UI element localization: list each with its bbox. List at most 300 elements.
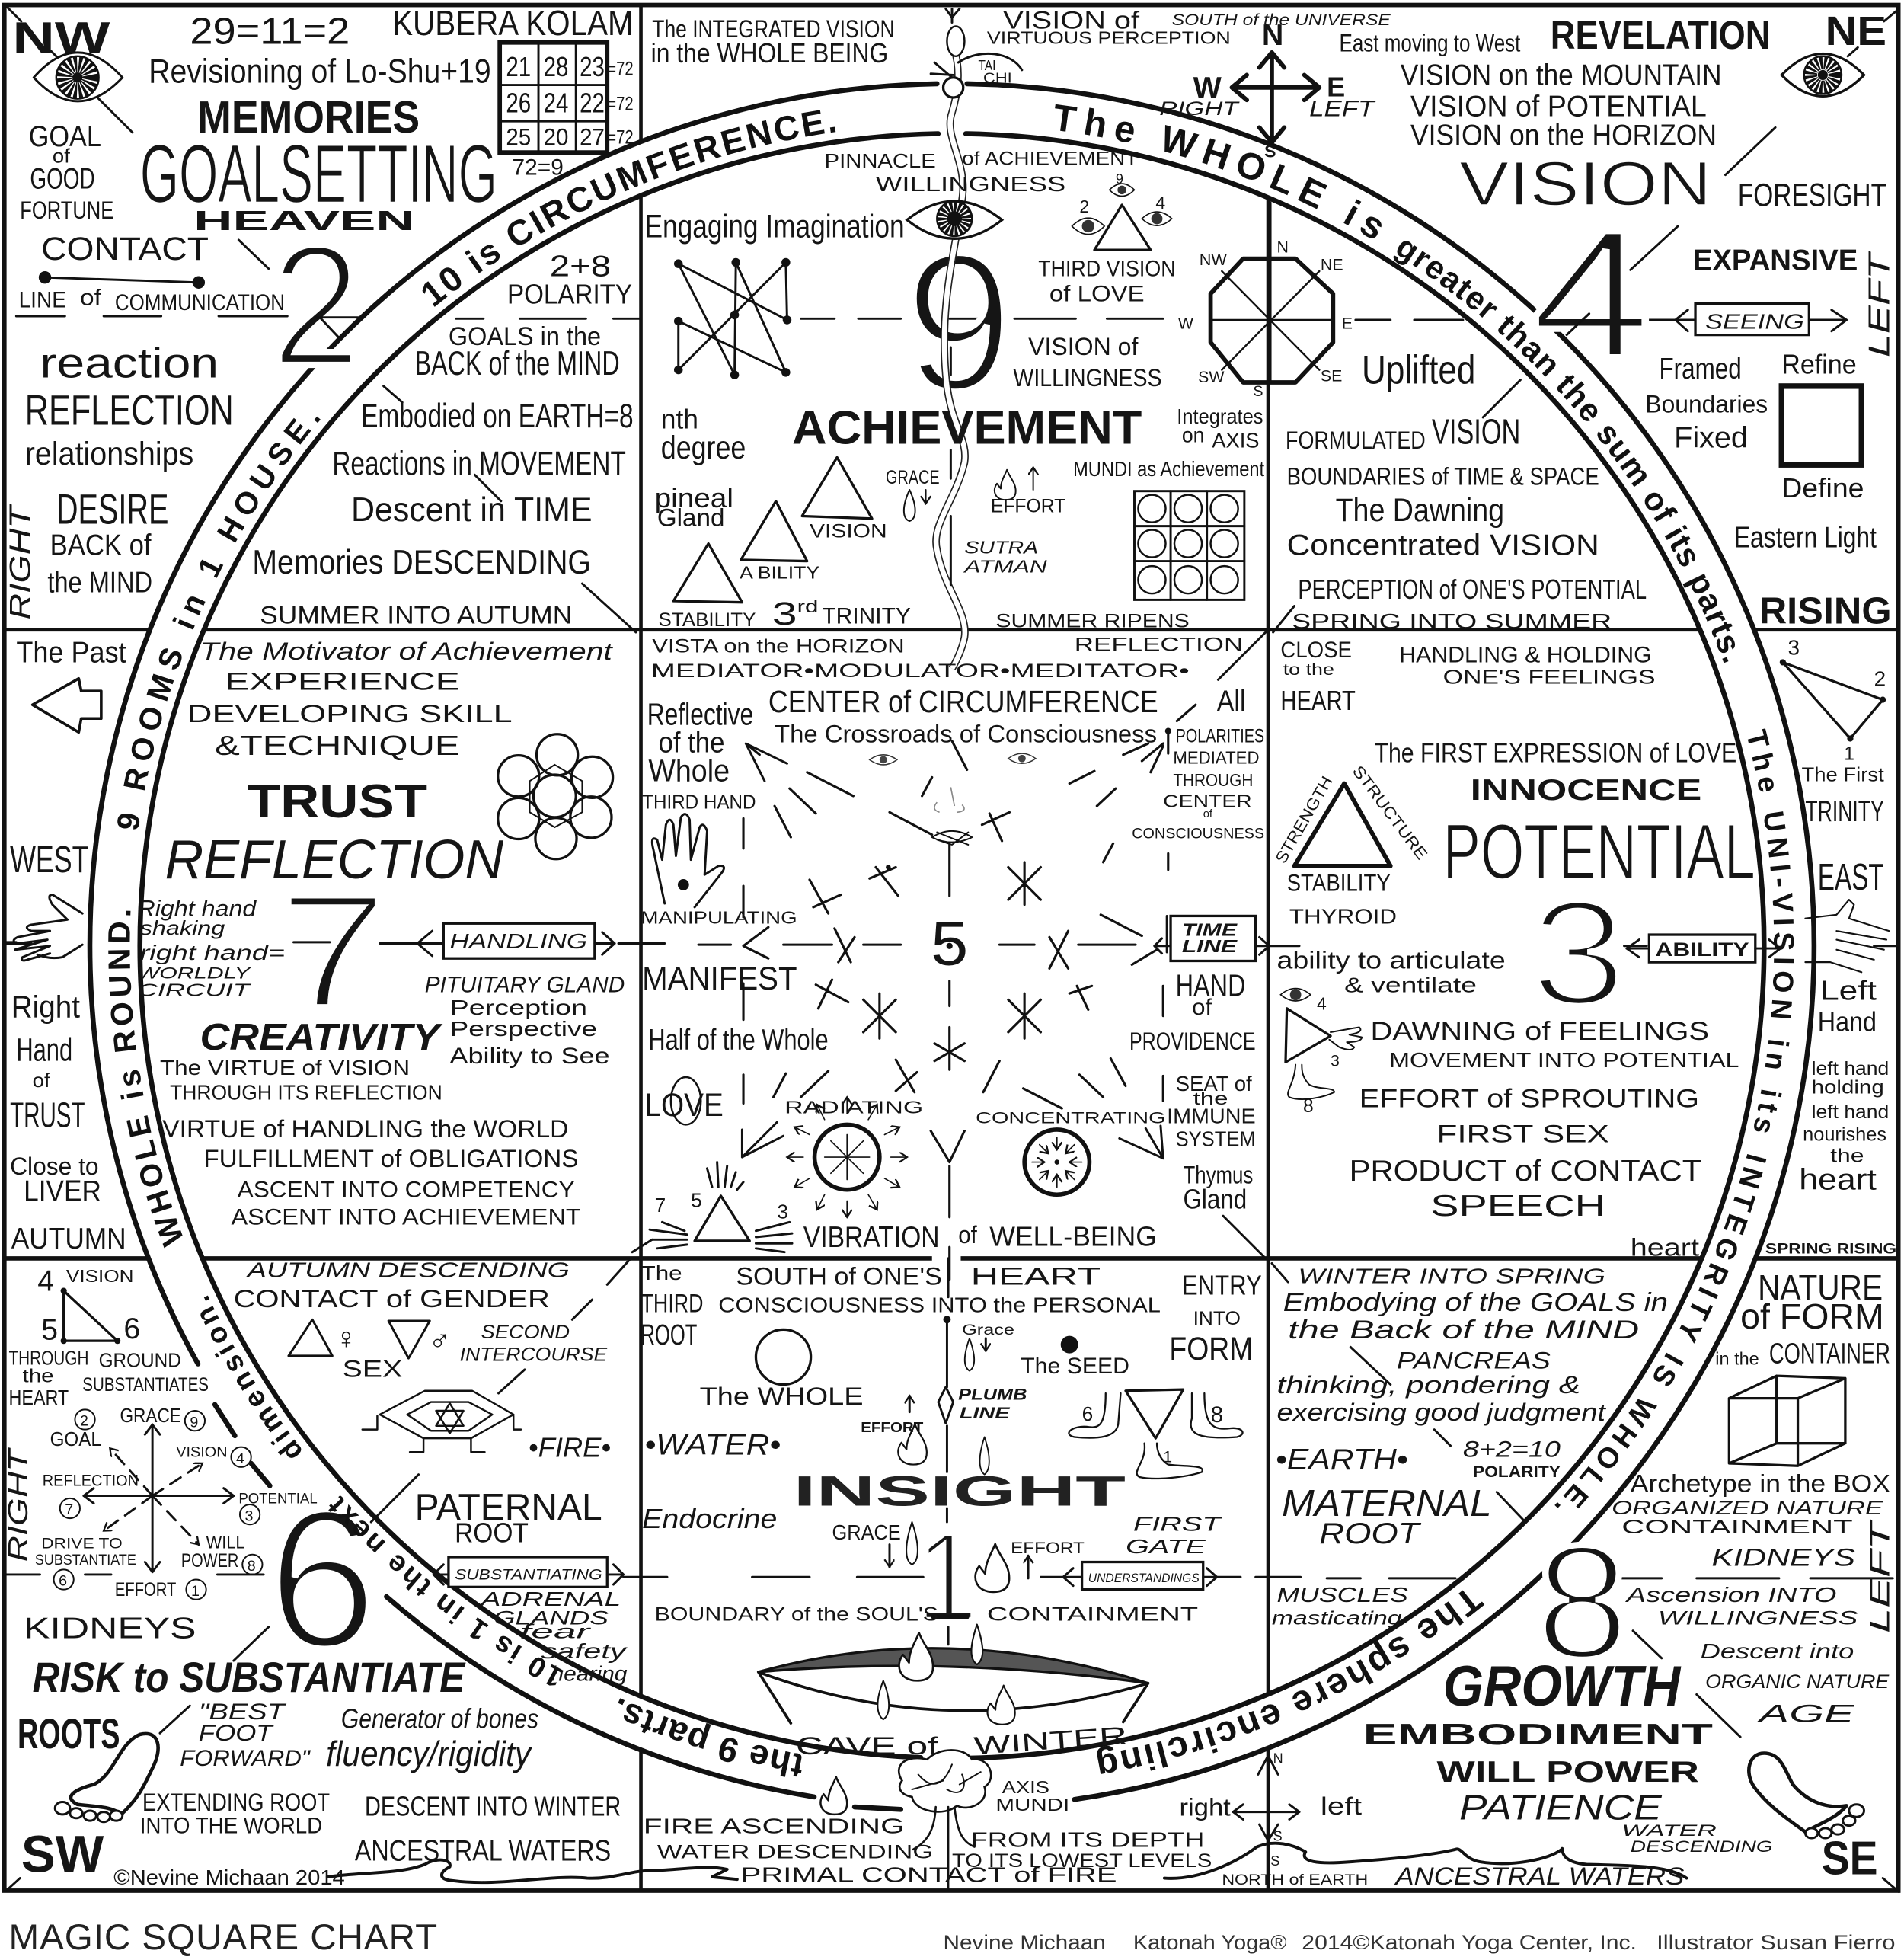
text: fire ascending water descending: PRIMAL CONTACT of FIRE xyxy=(741,1862,1117,1886)
text: manipulating, manifest, love xyxy=(641,907,829,1124)
text: muscles masticating xyxy=(1272,1583,1408,1629)
icon: triangle with eye, hand and foot: 8 xyxy=(1303,1096,1314,1117)
icon: third trinity triangles: VISION xyxy=(810,521,887,542)
text: winter into spring, embodying goals xyxy=(1272,1263,1668,1385)
text: vista and reflection: MEDIATOR•MODULATOR•MEDITATOR• xyxy=(651,661,1190,682)
text: dawning of feelings list: PRODUCT of CONTACT xyxy=(1350,1154,1701,1188)
ring text: 10 is 1 in the next: 10 is 1 in the next xyxy=(328,1495,564,1686)
text: all polarities mediated: of xyxy=(1203,808,1213,820)
text: contact, line of communication: CONTACT xyxy=(41,231,209,267)
text: right hand shaking: right hand= xyxy=(140,941,285,964)
text: generator of bones xyxy=(326,1703,538,1773)
chart: compass of grace and effort: DRIVE TO xyxy=(41,1535,123,1552)
ring text: the 9 parts: the 9 parts. xyxy=(618,1698,802,1777)
callout: substantiating xyxy=(433,1557,624,1587)
text: fire ascending water descending: TO ITS LOWEST LEVELS xyxy=(952,1851,1212,1872)
text: pancreas, thinking: thinking, pondering & xyxy=(1277,1370,1580,1399)
text: paternal root: ROOT xyxy=(455,1517,529,1548)
text: ancestral waters with wave xyxy=(327,1834,737,1882)
icon: gender triangles: ♂ xyxy=(429,1324,451,1357)
panel: N achievement (9) xyxy=(644,6,1391,669)
digit 4 xyxy=(1531,192,1678,397)
chart: kubera kolam number square: 27 xyxy=(580,123,605,150)
panel: W trust reflection (7) xyxy=(4,635,625,1255)
text: left hand nourishes heart xyxy=(1799,974,1889,1197)
text: the third root: ROOT xyxy=(641,1319,697,1351)
text: handling and holding feelings: ONE'S FEELINGS xyxy=(1443,665,1656,688)
text: integrates on axis mundi: Integrates xyxy=(1177,404,1263,428)
icon: octagon compass: W xyxy=(1178,314,1194,332)
panel: SW risk to substantiate (6) xyxy=(2,1258,737,1891)
text: right hand shaking: CIRCUIT xyxy=(137,980,252,999)
text: uplifted, formulated vision: Concentrated VISION xyxy=(1287,528,1599,561)
panel: NE vision (4) xyxy=(1273,8,1899,633)
icon: radiating circle: RADIATING xyxy=(784,1098,923,1117)
text: left hand nourishes heart: Hand xyxy=(1818,1006,1877,1037)
text: descent into organic nature: Descent into xyxy=(1701,1639,1854,1663)
icon: world tree xyxy=(899,1750,1069,1889)
text: vision of virtuous perception: VISION of xyxy=(1003,6,1140,34)
icon: left hand reaching xyxy=(1805,900,1889,972)
text: best foot forward: FOOT xyxy=(199,1721,274,1746)
text: the past: The Past xyxy=(16,635,126,669)
text: manipulating, manifest, love: MANIFEST xyxy=(642,961,797,997)
text: 29=11=2: 29=11=2 xyxy=(190,10,350,52)
text: water descending: DESCENDING xyxy=(1631,1837,1773,1856)
text: pinnacle of achievement willingness xyxy=(825,149,1138,196)
text: close to the heart xyxy=(1280,638,1356,716)
text: first expression of love: The FIRST EXPRESSION of LOVE xyxy=(1374,737,1736,769)
text: motivator of achievement: DEVELOPING SKILL xyxy=(187,699,513,727)
callout: handling: HANDLING xyxy=(450,929,587,953)
icon: first trinity triangle xyxy=(1780,636,1886,828)
side label left: LEFT xyxy=(1862,251,1896,357)
text: motivator of achievement: EXPERIENCE xyxy=(225,667,460,695)
callout: understanding: UNDERSTANDINGS xyxy=(1088,1572,1200,1585)
text: desire back of the mind: DESIRE xyxy=(56,485,168,532)
icon: triangle with feet: 8 xyxy=(1211,1402,1223,1428)
heading: revelation: REVELATION xyxy=(1551,13,1770,58)
text: through ground the heart: THROUGH xyxy=(8,1346,88,1369)
compass label NE with eye: NE xyxy=(1826,8,1886,54)
icon: compass cross: N xyxy=(1262,18,1283,52)
digit 3: 3 xyxy=(1531,869,1627,1037)
text: goal of good fortune: GOAL xyxy=(29,120,101,153)
text: right hand shaking xyxy=(137,896,285,999)
heading: trust: TRUST xyxy=(248,775,427,828)
text: manipulating, manifest, love: Half of the Whole xyxy=(648,1023,829,1057)
icon: octagon compass: SW xyxy=(1198,368,1225,386)
icon: substantiating triangle xyxy=(37,1265,140,1347)
text: water descending xyxy=(1621,1694,1773,1856)
text: all polarities mediated: CONSCIOUSNESS xyxy=(1132,826,1264,843)
heading: innocence: INNOCENCE xyxy=(1471,773,1701,807)
icon: first trinity triangle: 3 xyxy=(1787,636,1800,660)
icon: third trinity triangles: A BILITY xyxy=(740,563,819,583)
text: vision of virtuous perception: VIRTUOUS PERCEPTION xyxy=(987,27,1231,47)
text: virtue of vision and ascent: VIRTUE of HANDLING the WORLD xyxy=(162,1114,568,1143)
icon: strength structure stability triangle: THYROID xyxy=(1289,904,1397,928)
text: uplifted, formulated vision: VISION xyxy=(1432,411,1520,451)
chart: kubera kolam number square: 24 xyxy=(544,88,568,119)
text: nature of form xyxy=(1715,1268,1890,1370)
text: extending root: INTO THE WORLD xyxy=(140,1813,322,1838)
arrow: radiating SE xyxy=(1120,1126,1163,1159)
icon: triangle of three eyes xyxy=(1072,171,1172,250)
icon: facial features xyxy=(870,753,1036,845)
text: archetype in the box xyxy=(1612,1469,1890,1571)
icon: substantiating triangle: 6 xyxy=(123,1312,140,1345)
text: pituitary gland: Ability to See xyxy=(450,1044,610,1069)
text: hand of providence xyxy=(1129,967,1256,1055)
text: uplifted, formulated vision: FORMULATED xyxy=(1286,426,1426,454)
text: motivator of achievement xyxy=(187,637,614,761)
text: integrates on axis mundi: MUNDI as Achievement xyxy=(1073,457,1264,481)
callout: time line: LINE xyxy=(1182,936,1238,956)
icon: strength structure stability triangle: STRUCTURE xyxy=(1349,763,1431,863)
text: vista and reflection xyxy=(651,632,1266,682)
text: third vision of love: THIRD VISION xyxy=(1038,257,1176,282)
icon: octagon compass: SE xyxy=(1321,366,1342,385)
text: vision on the mountain list: VISION on the HORIZON xyxy=(1410,118,1717,152)
icon: square with refine and define: Define xyxy=(1781,472,1864,504)
icon: upper grace drop: Grace xyxy=(962,1322,1014,1338)
text: reflective of the whole: Whole xyxy=(648,753,730,788)
text: virtue of vision and ascent: ASCENT INTO ACHIEVEMENT xyxy=(231,1205,581,1230)
text: left hand nourishes heart: Left xyxy=(1820,974,1877,1006)
text: inner quadrant goals descending: Memories DESCENDING xyxy=(252,544,591,581)
text: vista and reflection: VISTA on the HORIZON xyxy=(652,636,905,657)
text: sutra atman xyxy=(950,347,1047,585)
text: integrates on axis mundi xyxy=(1073,404,1264,481)
icon: plumb line with bob: PLUMB xyxy=(958,1385,1027,1403)
text: south of one's heart: SOUTH of ONE'S xyxy=(736,1261,942,1290)
text: polarity 8+2=10: 8+2=10 xyxy=(1463,1437,1561,1463)
text: reaction reflection relationships: REFLECTION xyxy=(25,387,234,434)
callout: seeing: SEEING xyxy=(1705,309,1804,333)
icon: triangle of three eyes: 9 xyxy=(1116,171,1123,187)
text: muscles masticating: MUSCLES xyxy=(1277,1583,1408,1607)
text: descent into organic nature xyxy=(1701,1639,1890,1727)
text: inner quadrant goals descending: Descent in TIME xyxy=(351,491,593,529)
text: autumn descending, contact of gender: CONTACT of GENDER xyxy=(234,1284,550,1313)
footer credits xyxy=(944,1931,1896,1954)
text: right hand of trust: Close to xyxy=(10,1152,99,1180)
panel: SE growth (8) xyxy=(1164,1263,1899,1892)
icon: upper effort flame: EFFORT xyxy=(861,1420,923,1435)
text: the third root xyxy=(641,1261,704,1351)
digit 2: 2 xyxy=(271,209,361,401)
side label right: RIGHT xyxy=(2,1447,34,1562)
icon: octagon compass: N xyxy=(1277,238,1289,256)
text: close to the heart: HEART xyxy=(1280,685,1356,716)
icon: substantiating triangle: 4 xyxy=(37,1265,54,1298)
text: best foot forward: "BEST xyxy=(199,1699,287,1725)
arrow: radiating NW xyxy=(746,743,787,781)
chart: kubera kolam number square: 26 xyxy=(506,88,531,119)
icon: cave bowl with flames xyxy=(759,1625,1148,1725)
icon: compass cross: S xyxy=(1264,142,1276,161)
text: left hand nourishes heart: holding xyxy=(1812,1077,1884,1098)
text: thymus gland: Gland xyxy=(1183,1183,1247,1214)
icon: circle the whole xyxy=(700,1329,864,1410)
icon: third trinity triangles: 3 xyxy=(772,596,797,632)
text: summer ripens: SUMMER RIPENS xyxy=(995,611,1190,631)
compass label NE with eye xyxy=(1781,8,1899,96)
text: adrenal glands: GLANDS xyxy=(494,1609,609,1629)
text: all polarities mediated: POLARITIES xyxy=(1176,726,1264,747)
icon: lower compass: NORTH of EARTH xyxy=(1222,1872,1368,1888)
text: vibration of well-being: WELL-BEING xyxy=(989,1220,1157,1252)
text: inner quadrant goals descending: SUMMER INTO AUTUMN xyxy=(260,601,572,629)
chart: kubera kolam number square: =72 xyxy=(607,94,634,114)
label: SE: SE xyxy=(1822,1833,1878,1885)
text: reflective of the whole: Reflective xyxy=(647,696,753,731)
text: paternal root xyxy=(371,1475,602,1548)
text: all polarities mediated: All xyxy=(1217,684,1245,718)
text: hand of providence: of xyxy=(1192,995,1212,1020)
digit 9: 9 xyxy=(905,213,1013,432)
text: muscles masticating: masticating xyxy=(1272,1609,1402,1629)
text: best foot forward xyxy=(180,1699,311,1771)
text: nth degree, pineal gland xyxy=(655,404,746,532)
icon: kundalini serpent xyxy=(931,8,1022,669)
text: copyright: ©Nevine Michaan 2014 xyxy=(113,1866,345,1889)
side label right: RIGHT xyxy=(3,504,37,620)
text: entry into form: FORM xyxy=(1169,1331,1253,1367)
text: extending root: EXTENDING ROOT xyxy=(142,1788,330,1816)
icon: gender triangles: SEX xyxy=(342,1356,402,1383)
text: pancreas, thinking: exercising good judgment xyxy=(1277,1398,1607,1426)
text: integrated vision: The INTEGRATED VISION xyxy=(652,14,895,43)
icon: octagon compass xyxy=(1178,203,1353,400)
icon: triangle of three eyes: 4 xyxy=(1155,193,1165,213)
compass label NW with eye xyxy=(6,6,133,133)
text: adrenal glands: fear xyxy=(519,1620,592,1643)
icon: third hand xyxy=(652,814,724,907)
text: vision on the mountain list: VISION on the MOUNTAIN xyxy=(1401,59,1721,92)
text: handling and holding feelings: HANDLING & HOLDING xyxy=(1399,642,1652,667)
heading: risk to substantiate xyxy=(33,1627,466,1701)
chart: compass of grace and effort: GOAL xyxy=(50,1428,101,1450)
text: patience: PATIENCE xyxy=(1459,1787,1663,1827)
heading: insight: INSIGHT xyxy=(794,1468,1126,1515)
text: pancreas, thinking: PANCREAS xyxy=(1397,1347,1551,1373)
icon: concentrating circle xyxy=(976,1109,1166,1194)
heading: expansive: EXPANSIVE xyxy=(1693,243,1858,277)
text: framed boundaries fixed: Boundaries xyxy=(1645,389,1768,417)
icon: triangle with feet xyxy=(1069,1389,1243,1479)
text: polarity 8+2=10: POLARITY xyxy=(1473,1463,1561,1481)
text: nth degree, pineal gland: degree xyxy=(661,430,746,466)
text: through ground the heart: SUBSTANTIATES xyxy=(82,1375,209,1396)
text: vision of willingness: WILLINGNESS xyxy=(1013,363,1162,392)
icon: triangle of three eyes: 2 xyxy=(1079,197,1089,216)
text: pancreas, thinking xyxy=(1277,1347,1607,1446)
text: seat of the immune system: IMMUNE xyxy=(1167,1105,1256,1128)
text: uplifted, formulated vision: The Dawning xyxy=(1336,492,1504,529)
text: motivator of achievement: &TECHNIQUE xyxy=(215,730,460,761)
chart: compass of grace and effort: 1 xyxy=(191,1583,200,1600)
callout: time line xyxy=(1155,916,1270,961)
text: fire ascending water descending: WATER DESCENDING xyxy=(657,1842,933,1862)
ring text: 9 rooms in 1 house: 9 ROOMS in 1 HOUSE. xyxy=(117,416,321,830)
text: kubera kolam: KUBERA KOLAM xyxy=(392,3,634,43)
chart: compass of grace and effort: 2 xyxy=(80,1413,88,1430)
icon: flower of circles xyxy=(498,734,613,859)
text: earth: •EARTH• xyxy=(1276,1443,1408,1476)
ring text: dimension: dimension. xyxy=(200,1295,302,1458)
chart: compass of grace and effort: POWER xyxy=(181,1551,238,1572)
text: foresight xyxy=(1725,127,1886,214)
callout: understanding xyxy=(1063,1562,1217,1590)
chart: kubera kolam number square: 21 xyxy=(506,51,531,82)
text: goal of good fortune xyxy=(20,120,113,224)
icon: strength structure stability triangle: STRENGTH xyxy=(1272,773,1337,867)
text: virtue of vision and ascent xyxy=(160,1056,581,1230)
text: seat of the immune system: the xyxy=(1193,1089,1228,1108)
panel: NW goal setting (2) xyxy=(3,3,636,632)
title: magic square chart: MAGIC SQUARE CHART xyxy=(8,1917,437,1958)
text: kidneys: KIDNEYS xyxy=(24,1612,196,1645)
text: water endocrine: •WATER• xyxy=(644,1428,781,1461)
icon: triangle with eye, hand and foot: 4 xyxy=(1317,993,1327,1013)
text: sutra atman: ATMAN xyxy=(963,556,1047,576)
icon: third trinity triangles xyxy=(659,457,911,632)
text: hand of providence: PROVIDENCE xyxy=(1129,1027,1256,1055)
text: maternal root: ROOT xyxy=(1319,1517,1422,1550)
text: uplifted, formulated vision xyxy=(1273,348,1647,633)
callout: time line: TIME xyxy=(1182,920,1238,940)
text: all polarities mediated: THROUGH xyxy=(1173,770,1253,790)
footer credits: Nevine Michaan xyxy=(944,1931,1106,1954)
text: fire ascending water descending: FIRE ASCENDING xyxy=(644,1814,905,1837)
text: second intercourse: SECOND xyxy=(481,1322,570,1343)
text: vibration of well-being xyxy=(803,1220,1157,1254)
text: vista and reflection: REFLECTION xyxy=(1075,635,1243,656)
text: desire back of the mind: BACK of xyxy=(50,528,152,561)
chart: kubera kolam number square: 25 xyxy=(506,123,531,150)
text: thymus gland xyxy=(1183,1160,1266,1258)
panel: S insight (1) xyxy=(641,1258,1368,1889)
text: through ground the heart: GROUND xyxy=(99,1349,181,1372)
callout: substantiating: SUBSTANTIATING xyxy=(455,1566,602,1583)
text: paternal root: PATERNAL xyxy=(415,1486,602,1528)
text: right hand of trust: TRUST xyxy=(10,1095,85,1135)
icon: kundalini serpent: TAI xyxy=(978,58,995,73)
text: cave of winter xyxy=(796,1721,1128,1760)
text: best foot forward: FORWARD" xyxy=(180,1746,311,1771)
ring text: whole is round: WHOLE is ROUND. xyxy=(108,911,183,1248)
panel: E potential (3) xyxy=(1272,636,1896,1261)
icon: compass cross: LEFT xyxy=(1309,97,1376,122)
chart: compass of grace and effort: GRACE xyxy=(120,1404,181,1427)
text: polarity xyxy=(507,250,632,310)
text: pituitary gland: Perception xyxy=(450,996,587,1019)
icon: lower compass: S xyxy=(1270,1853,1279,1869)
icon: imagination number line figure xyxy=(674,258,791,379)
text: ancestral waters with wave: ANCESTRAL WATERS xyxy=(1394,1862,1684,1890)
ring text: the whole is: The WHOLE is xyxy=(1055,104,1382,238)
icon: third trinity triangles: rd xyxy=(797,596,818,616)
chart: kubera kolam number square: 20 xyxy=(544,123,568,150)
text: right hand of trust: Hand xyxy=(16,1032,72,1069)
text: integrated vision xyxy=(651,14,895,69)
text: uplifted, formulated vision: Uplifted xyxy=(1362,348,1475,393)
text: water endocrine: Endocrine xyxy=(642,1503,777,1534)
icon: world tree: MUNDI xyxy=(995,1795,1069,1815)
text: pituitary gland: Perspective xyxy=(450,1017,597,1041)
text: second intercourse xyxy=(460,1300,608,1393)
text: pinnacle of achievement willingness: WILLINGNESS xyxy=(876,172,1065,196)
text: west: WEST xyxy=(10,839,88,881)
icon: right hand reaching xyxy=(4,895,82,961)
chart: kubera kolam number square xyxy=(500,43,634,181)
text: contact, line of communication: LINE xyxy=(19,288,66,313)
icon: grace drop and arrow: GRACE xyxy=(886,468,940,488)
text: dawning of feelings list: EFFORT of SPROUTING xyxy=(1359,1084,1699,1113)
side label left: LEFT xyxy=(1864,1518,1895,1633)
text: south of one's heart xyxy=(718,1261,1161,1316)
icon: lower compass: N xyxy=(1273,1751,1283,1767)
text: descent into organic nature: AGE xyxy=(1756,1699,1855,1727)
text: right hand of trust xyxy=(10,989,126,1255)
heading: memories: MEMORIES xyxy=(197,92,420,142)
text: right hand of trust: of xyxy=(33,1069,50,1092)
text: inner quadrant goals descending: Reactions in MOVEMENT xyxy=(332,445,626,482)
text: winter into spring, embodying goals: WINTER INTO SPRING xyxy=(1298,1265,1605,1288)
chart: compass of grace and effort: REFLECTION xyxy=(43,1471,139,1489)
text: framed boundaries fixed: Framed xyxy=(1659,352,1742,385)
icon: third trinity triangles: TRINITY xyxy=(822,604,911,629)
icon: compass cross: E xyxy=(1327,71,1345,102)
text: right hand of trust: Right xyxy=(11,989,81,1024)
text: ascension into willingness: WILLINGNESS xyxy=(1658,1609,1858,1629)
text: reflective of the whole xyxy=(647,696,753,788)
heading: center of circumference: CENTER of CIRCUMFERENCE xyxy=(768,684,1158,719)
text: ability to articulate xyxy=(1277,945,1506,996)
text: contact, line of communication: COMMUNICATION xyxy=(115,290,285,315)
icon: compass cross: W xyxy=(1193,71,1222,104)
text: contact, line of communication xyxy=(16,231,287,316)
icon: triangle of three hands: 3 xyxy=(777,1200,788,1223)
text: right hand shaking: WORLDLY xyxy=(137,964,252,982)
callout: ability: ABILITY xyxy=(1656,940,1749,961)
text: all polarities mediated: CENTER xyxy=(1163,791,1252,811)
icon: gender triangles: ♀ xyxy=(335,1322,357,1355)
text: the third root: The xyxy=(641,1261,682,1284)
icon: plumb line with bob xyxy=(938,1258,1027,1522)
compass label NW with eye: NW xyxy=(12,14,110,62)
heading: potential: POTENTIAL xyxy=(1443,808,1755,895)
icon: the seed: The SEED xyxy=(1021,1354,1129,1379)
chart: compass of grace and effort: 6 xyxy=(59,1573,67,1590)
text: dawning of feelings list: FIRST SEX xyxy=(1436,1119,1609,1147)
heading: risk to substantiate: RISK to SUBSTANTIATE xyxy=(33,1654,466,1701)
text: ascension into willingness: Ascension INTO xyxy=(1624,1583,1836,1607)
footer credits: Katonah Yoga® xyxy=(1133,1931,1287,1954)
callout: seeing xyxy=(1676,304,1847,335)
text: south of the universe: SOUTH of the UNIVERSE xyxy=(1172,11,1391,29)
label: SW: SW xyxy=(21,1824,104,1883)
text: south of one's heart: CONSCIOUSNESS INTO the PERSONAL xyxy=(718,1293,1161,1316)
icon: compass cross: RIGHT xyxy=(1159,99,1240,120)
icon: triangle with eye, hand and foot: 3 xyxy=(1331,1051,1340,1070)
text: polarity: POLARITY xyxy=(507,279,632,310)
text: framed boundaries fixed xyxy=(1645,352,1768,454)
text: second intercourse: INTERCOURSE xyxy=(460,1345,608,1365)
text: nature of form: of FORM xyxy=(1740,1297,1884,1336)
